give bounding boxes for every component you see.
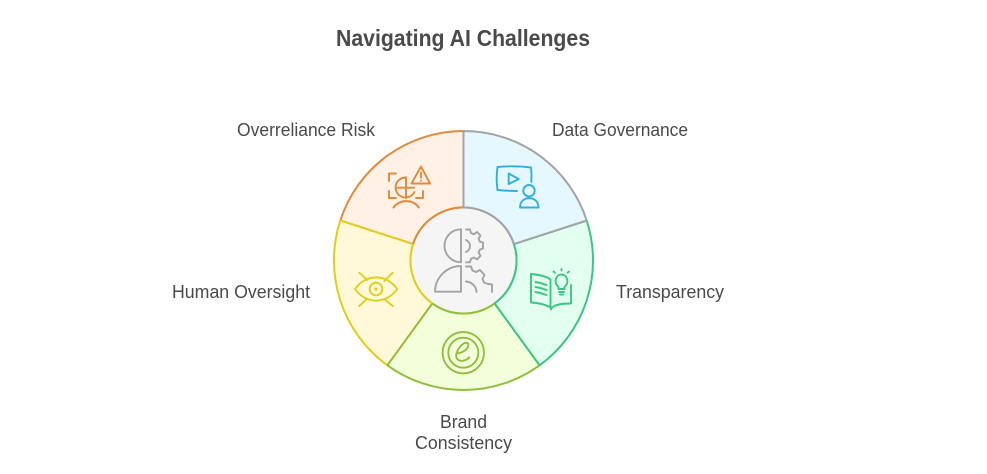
icon: book and lightbulb <box>531 269 571 310</box>
icon: chart and warning <box>389 166 430 208</box>
icon: head and gears <box>435 229 492 292</box>
icon: video and person <box>497 166 538 208</box>
label: data governance: Data Governance <box>552 120 688 140</box>
label: brand consistency: Consistency <box>415 433 512 453</box>
segment: transparency <box>495 220 593 365</box>
label: human oversight: Human Oversight <box>172 282 310 302</box>
label: brand consistency <box>415 412 512 453</box>
segment: human oversight <box>334 220 432 365</box>
label: transparency: Transparency <box>616 282 724 302</box>
icon: eye <box>355 273 397 306</box>
segment: brand consistency <box>387 303 540 390</box>
label: overreliance risk: Overreliance Risk <box>237 120 376 140</box>
label: brand consistency: Brand <box>440 412 487 432</box>
segment: overreliance risk <box>340 131 464 244</box>
title: Navigating AI Challenges <box>336 25 590 51</box>
center circle <box>411 207 516 313</box>
icon: brand emblem <box>443 332 484 373</box>
segment: data governance <box>464 131 587 244</box>
